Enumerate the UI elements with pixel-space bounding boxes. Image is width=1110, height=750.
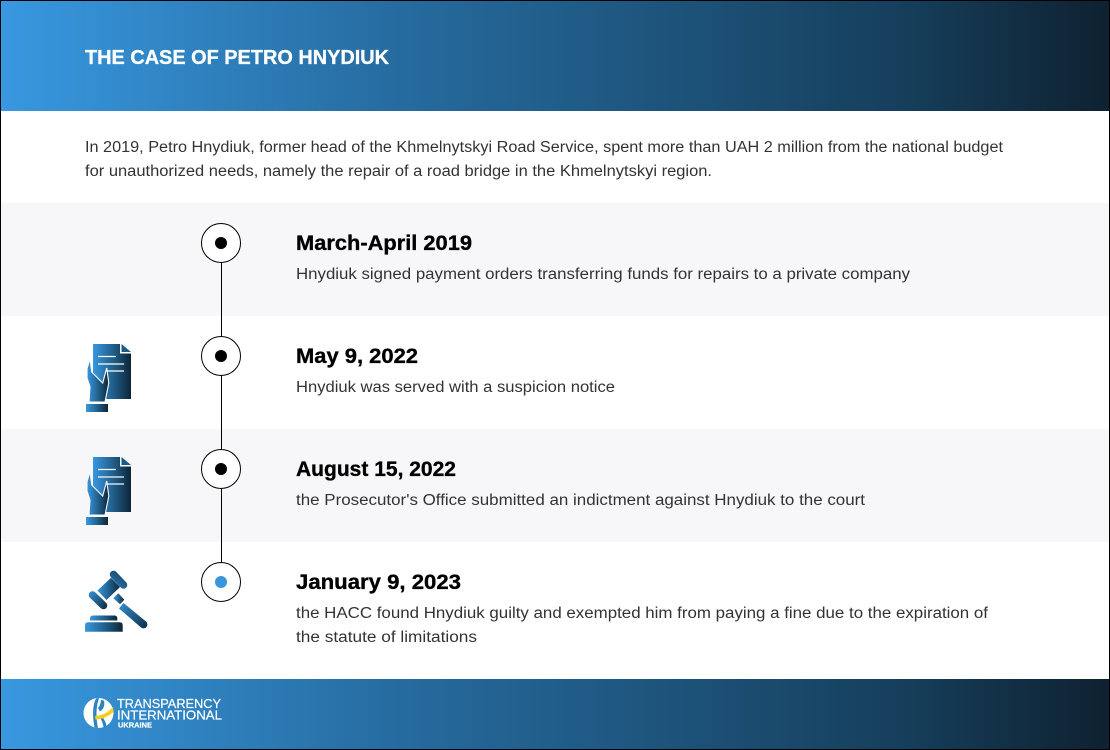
- logo: Transparency International Ukraine: [84, 696, 222, 730]
- event 1: March-April 2019: [296, 232, 472, 255]
- intro text: [85, 139, 1004, 180]
- logo wordmark: TRANSPARENCY: [117, 696, 221, 711]
- timeline marker 2: [202, 336, 240, 376]
- event 2: May 9, 2022: [296, 345, 418, 368]
- event 3: [296, 458, 866, 509]
- event 4: the statute of limitations: [296, 629, 477, 646]
- timeline connector: [220, 262, 222, 563]
- event 2: [296, 345, 615, 396]
- icon: document in hand (May 2022): [86, 344, 131, 412]
- timeline marker 1: [202, 224, 240, 262]
- footer banner: [0, 679, 1110, 750]
- timeline marker 3: [202, 450, 240, 488]
- timeline marker 4: [202, 562, 240, 602]
- intro text: for unauthorized needs, namely the repair of a road bridge in the Khmelnytskyi region.: [85, 163, 712, 180]
- event 1: [296, 232, 910, 283]
- row background: March-April 2019: [0, 203, 1110, 316]
- event 3: the Prosecutor's Office submitted an indictment against Hnydiuk to the court: [296, 492, 866, 509]
- title: THE CASE OF PETRO HNYDIUK: [85, 46, 389, 69]
- event 4: January 9, 2023: [296, 571, 461, 594]
- event 2: Hnydiuk was served with a suspicion notice: [296, 379, 615, 396]
- event 1: Hnydiuk signed payment orders transferring funds for repairs to a private company: [296, 266, 910, 283]
- icon: judge gavel: [85, 574, 147, 632]
- logo wordmark: [117, 696, 222, 730]
- event 4: the HACC found Hnydiuk guilty and exempted him from paying a fine due to the expiration of: [296, 605, 989, 622]
- event 3: August 15, 2022: [296, 458, 456, 481]
- intro text: In 2019, Petro Hnydiuk, former head of the Khmelnytskyi Road Service, spent more than UAH 2 million from the national budget: [85, 139, 1004, 156]
- row background: August 15, 2022: [0, 429, 1110, 542]
- logo wordmark: UKRAINE: [118, 722, 152, 730]
- logo wordmark: INTERNATIONAL: [117, 707, 222, 722]
- icon: logo globe: [84, 698, 114, 728]
- event 4: [296, 571, 989, 646]
- icon: document in hand (August 2022): [86, 457, 131, 525]
- header banner: [0, 0, 1110, 111]
